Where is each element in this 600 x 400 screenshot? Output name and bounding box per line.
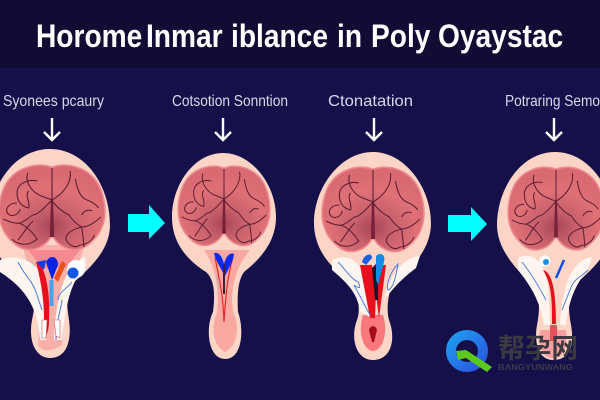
down arrow 1 [44,118,60,140]
title: iblance [231,19,328,54]
step label 3: Ctonatation [328,93,413,110]
down arrow 2 [215,118,231,140]
title: Horome [36,19,142,54]
down arrow 3 [366,118,382,140]
figure 4 [497,152,600,360]
figure 2 [172,153,276,359]
title: Inmar [146,19,223,54]
title banner [0,0,600,68]
flow arrow 1 [128,205,165,239]
icon: Q logo [451,335,492,372]
down arrow 4 [546,118,562,140]
watermark name: 帮孕网 [498,334,578,364]
title: Poly [371,19,431,54]
title: Oyaystac [438,19,563,54]
watermark [451,334,578,372]
title: in [337,19,362,54]
figure 1 [0,149,110,358]
step label 2: Cotsotion Sonntion [172,93,288,110]
figure 3 [314,152,431,360]
flow arrow 2 [448,207,487,241]
step label 1: Syonees pcaury [3,93,104,110]
watermark pinyin: BANGYUNWANG [498,363,573,372]
